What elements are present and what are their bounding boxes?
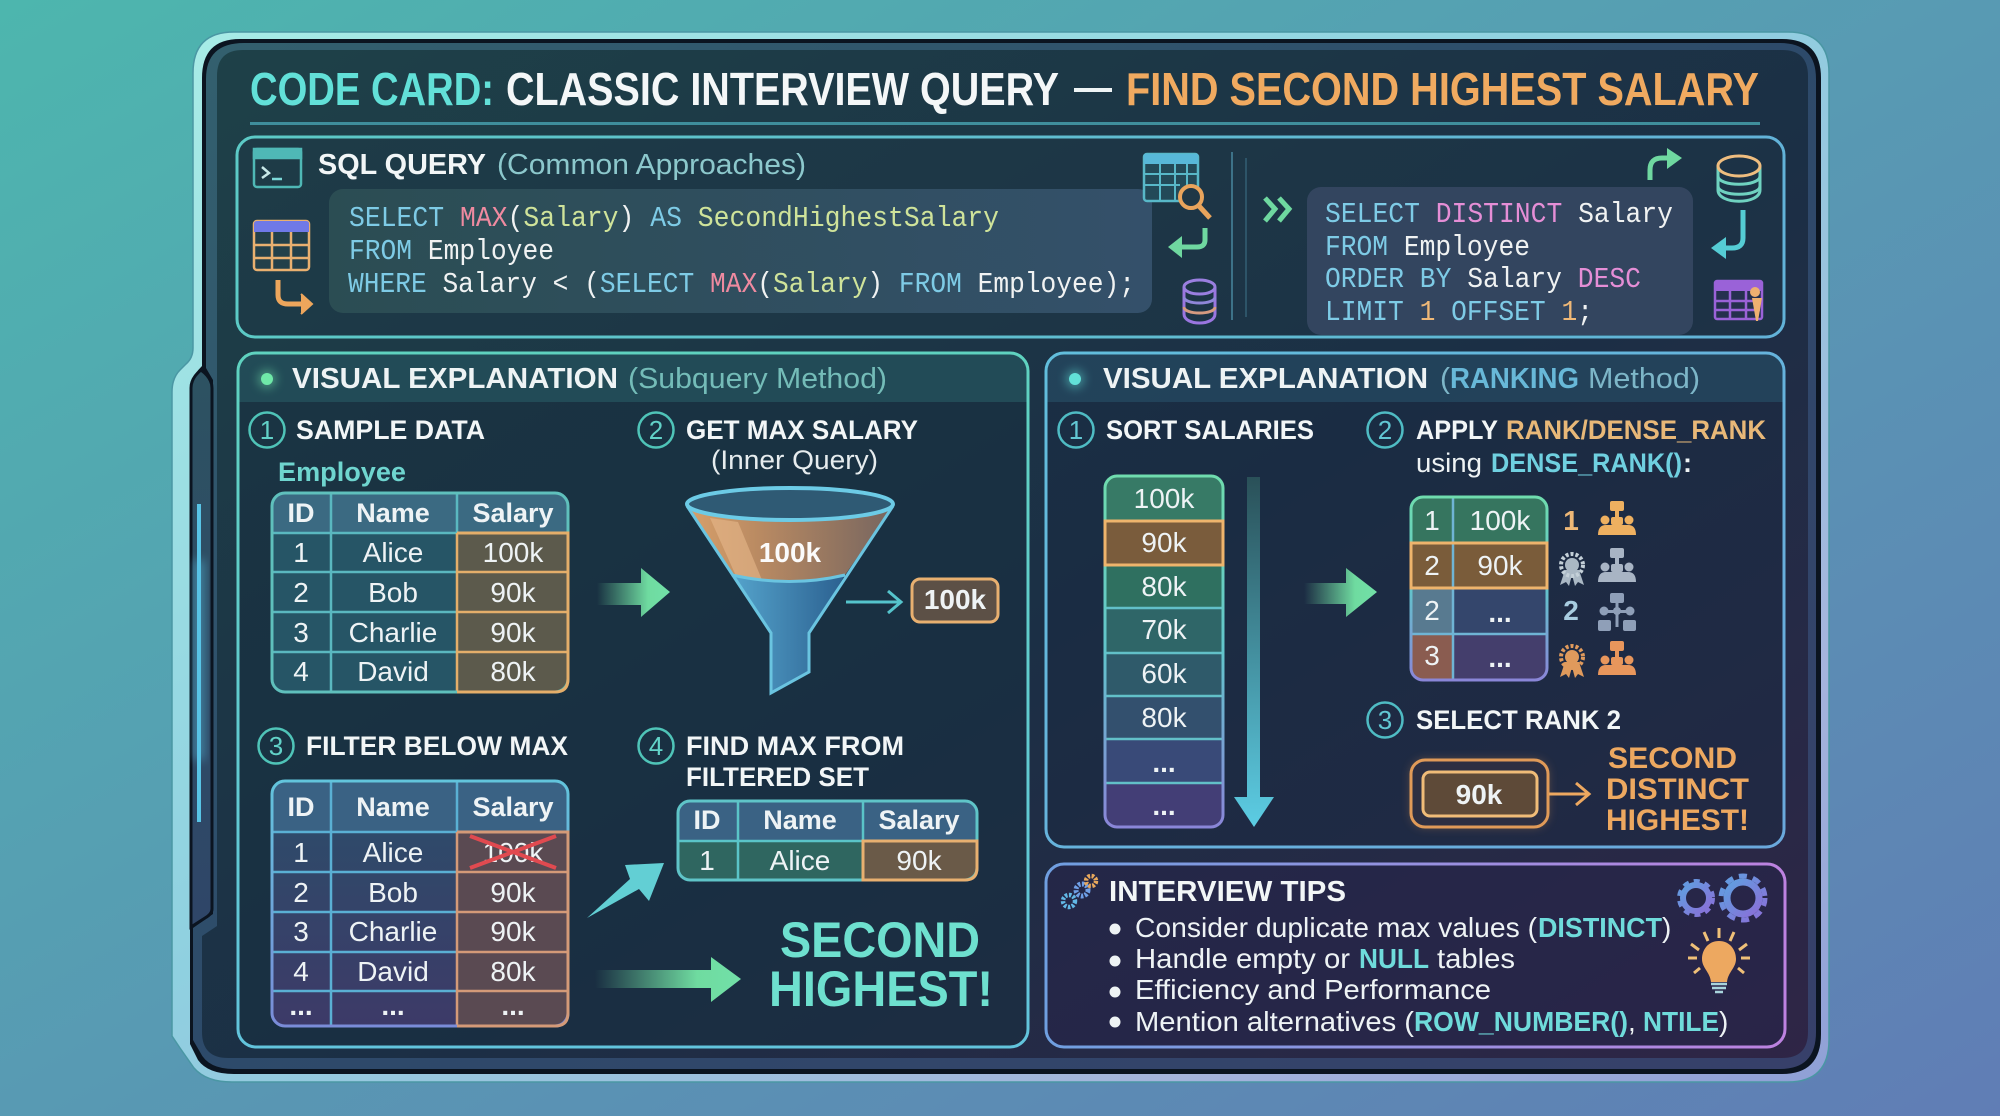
result box 100k: [912, 579, 998, 622]
panel header: RANKING: [1450, 363, 1579, 395]
panel header: Method): [1588, 363, 1700, 395]
icon: database: [1718, 156, 1760, 201]
sql heading: SQL QUERY: [318, 149, 486, 181]
callout: second distinct highest: HIGHEST!: [1606, 804, 1749, 837]
tips list: Consider duplicate max values (: [1135, 912, 1538, 943]
rank table: ...: [1488, 642, 1512, 673]
title: CLASSIC INTERVIEW QUERY: [506, 63, 1059, 115]
title: FIND SECOND HIGHEST SALARY: [1126, 63, 1759, 115]
table: filter below max: 90k: [490, 916, 537, 947]
table: filter below max: Alice: [363, 837, 423, 868]
rank labels and icons: 2: [1563, 595, 1579, 626]
table: filtered result: 90k: [896, 845, 943, 876]
icon: orange arrow: [278, 280, 312, 314]
table: filter below max: 4: [293, 956, 309, 987]
arrow: selected to label: [1549, 783, 1589, 805]
tips list: NULL: [1359, 943, 1429, 974]
table: sample data: 3: [293, 617, 309, 648]
divider: [1231, 152, 1247, 320]
rank table: 1: [1424, 505, 1440, 536]
code block 1: WHERE Salary < (SELECT MAX(Salary) FROM Employee);: [348, 268, 1135, 301]
step 1: 1: [1069, 415, 1083, 445]
step 2: [1368, 412, 1766, 478]
tips list: ROW_NUMBER(): [1414, 1006, 1628, 1037]
table: filter below max: ...: [289, 990, 313, 1021]
sorted salary stack: [1105, 476, 1223, 827]
step 2: RANK/DENSE_RANK: [1506, 415, 1766, 445]
callout: second highest: SECOND: [780, 912, 980, 968]
sorted salary stack: 80k: [1141, 702, 1188, 733]
code block 2: SELECT DISTINCT Salary: [1325, 198, 1673, 231]
table: sample data: 4: [293, 656, 309, 687]
step 3: FILTER BELOW MAX: [306, 731, 568, 761]
result box 100k: 100k: [924, 584, 987, 615]
strike: removed max: [470, 836, 556, 868]
table: filter below max: ...: [381, 990, 405, 1021]
step 2: [638, 412, 918, 475]
panel header: VISUAL EXPLANATION: [1103, 363, 1428, 395]
table: filter below max: ...: [501, 990, 525, 1021]
icon: terminal: [254, 149, 301, 187]
sorted salary stack: ...: [1152, 790, 1176, 821]
panel header: [258, 363, 887, 395]
table: filter below max: 80k: [490, 956, 537, 987]
callout: second distinct highest: DISTINCT: [1606, 773, 1749, 806]
rank table: 2: [1424, 595, 1440, 626]
table: sample data: 80k: [490, 656, 537, 687]
rank table: 100k: [1470, 505, 1531, 536]
arrow: to result: [595, 957, 741, 1002]
panel header: [1066, 363, 1700, 395]
sql heading: [318, 149, 806, 181]
callout: second highest: [769, 912, 993, 1017]
table: filter below max: Bob: [368, 877, 418, 908]
rank table: 90k: [1477, 550, 1524, 581]
step 2: (Inner Query): [711, 445, 878, 475]
panel header: (: [1440, 363, 1450, 395]
step 2: APPLY: [1416, 415, 1498, 445]
callout: second distinct highest: [1606, 742, 1749, 837]
step 1: SAMPLE DATA: [296, 415, 485, 445]
panel: sql query: [237, 137, 1784, 337]
step 2: 2: [649, 415, 663, 445]
panel header: (Subquery Method): [628, 363, 887, 395]
sorted salary stack: 70k: [1141, 614, 1188, 645]
tips list: ): [1662, 912, 1671, 943]
title: [250, 63, 1759, 115]
step 4: [638, 728, 904, 792]
icon: purple table with key: [1715, 281, 1762, 321]
table: filter below max: 3: [293, 916, 309, 947]
icon: teal return arrow: [1711, 210, 1743, 259]
step 3: 3: [269, 731, 283, 761]
rank table: 2: [1424, 550, 1440, 581]
table: filtered result: Alice: [770, 845, 830, 876]
tips list: [1110, 912, 1728, 1037]
tips list: ,: [1628, 1006, 1636, 1037]
step 1: 1: [260, 415, 274, 445]
icon: table magnifier: [1144, 154, 1210, 218]
step 2: using: [1416, 448, 1482, 478]
tips list: ): [1719, 1006, 1728, 1037]
tips list: tables: [1437, 943, 1515, 974]
arrow: funnel to result: [846, 591, 901, 613]
step 3: SELECT RANK 2: [1416, 705, 1621, 735]
code block 1: [329, 189, 1152, 313]
code block 2: LIMIT 1 OFFSET 1;: [1325, 296, 1593, 329]
tips heading: INTERVIEW TIPS: [1109, 876, 1346, 908]
rank table: ...: [1488, 597, 1512, 628]
sorted salary stack: 80k: [1141, 571, 1188, 602]
table: sample data: 90k: [490, 577, 537, 608]
step 2: 2: [1378, 415, 1392, 445]
icon: funnel: 100k: [759, 537, 822, 568]
table: filter below max: 1: [293, 837, 309, 868]
table: filter below max: 2: [293, 877, 309, 908]
callout: second highest: HIGHEST!: [769, 961, 993, 1017]
table: sample data: ID: [288, 498, 314, 528]
panel: subquery method: [238, 353, 1028, 1047]
title: CODE CARD:: [250, 63, 494, 115]
icon: light bulb: [1688, 928, 1750, 992]
tips list: Handle empty or: [1135, 943, 1350, 974]
step 4: 4: [649, 731, 663, 761]
tips list: Efficiency and Performance: [1135, 974, 1491, 1005]
table: sample data: Alice: [363, 537, 423, 568]
table: filtered result: [678, 801, 977, 880]
panel header: VISUAL EXPLANATION: [292, 363, 618, 395]
table: filter below max: ID: [288, 792, 314, 822]
sorted salary stack: ...: [1152, 747, 1176, 778]
icon: chevrons: [1265, 198, 1289, 221]
table: filter below max: [272, 781, 568, 1026]
table: sample data: Name: [356, 498, 430, 528]
step 2: :: [1683, 448, 1692, 478]
table: filter below max: Charlie: [349, 916, 437, 947]
table: sample data: David: [357, 656, 429, 687]
step 2: GET MAX SALARY: [686, 415, 918, 445]
sorted salary stack: 100k: [1134, 483, 1195, 514]
step 1: [1058, 412, 1314, 448]
rank labels and icons: 1: [1563, 505, 1579, 536]
table: filter below max: David: [357, 956, 429, 987]
table: filter below max: Name: [356, 792, 430, 822]
device frame: [172, 32, 1829, 1082]
step 1: [250, 412, 485, 448]
code block 1: SELECT MAX(Salary) AS SecondHighestSalary: [349, 202, 999, 235]
table: sample data: 2: [293, 577, 309, 608]
callout: second distinct highest: SECOND: [1608, 742, 1737, 775]
icon: gears: [1679, 876, 1765, 920]
sql heading: (Common Approaches): [497, 149, 806, 181]
step 3: [1368, 702, 1621, 738]
code block 2: FROM Employee: [1325, 231, 1530, 264]
tips list: NTILE: [1643, 1006, 1719, 1037]
selected value box: [1411, 760, 1548, 827]
selected value box: 90k: [1456, 779, 1503, 810]
arrow: diagonal: [587, 863, 664, 918]
table: filter below max: 100k: [483, 837, 544, 868]
panel: ranking method: [1046, 353, 1784, 847]
step 4: FILTERED SET: [686, 762, 869, 792]
tips list: DISTINCT: [1538, 912, 1662, 943]
table caption: Employee: [278, 457, 406, 487]
arrow: sort direction: [1234, 477, 1274, 827]
rank table: [1411, 497, 1547, 680]
table: filtered result: Salary: [878, 805, 960, 835]
table: filtered result: Name: [763, 805, 837, 835]
table: filtered result: ID: [694, 805, 720, 835]
table: sample data: Bob: [368, 577, 418, 608]
table: sample data: Salary: [472, 498, 554, 528]
table: filtered result: 1: [699, 845, 715, 876]
arrow: sort to rank: [1304, 568, 1377, 617]
code block 2: [1307, 187, 1693, 335]
rank table: 3: [1424, 640, 1440, 671]
panel: interview tips: [1046, 864, 1785, 1047]
table: sample data: 100k: [483, 537, 544, 568]
table: sample data: 90k: [490, 617, 537, 648]
code block 1: FROM Employee: [349, 235, 554, 268]
icon: table orange: [254, 221, 309, 270]
table: sample data: [272, 493, 568, 692]
icon: purple database: [1184, 280, 1215, 323]
sorted salary stack: 90k: [1141, 527, 1188, 558]
table: filter below max: Salary: [472, 792, 554, 822]
step 3: 3: [1378, 705, 1392, 735]
table: filter below max: 90k: [490, 877, 537, 908]
icon: funnel: [687, 488, 893, 693]
icon: small gears: [1063, 876, 1096, 907]
arrow: table to funnel: [597, 568, 670, 617]
icon: green up arrow: [1650, 148, 1682, 180]
rank labels and icons: [1560, 501, 1636, 678]
step 4: FIND MAX FROM: [686, 731, 904, 761]
icon: green return arrow: [1168, 228, 1205, 258]
code block 2: ORDER BY Salary DESC: [1325, 263, 1641, 296]
left side slot: [191, 370, 212, 927]
table: sample data: 1: [293, 537, 309, 568]
sorted salary stack: 60k: [1141, 658, 1188, 689]
step 2: DENSE_RANK(): [1491, 448, 1682, 478]
table: sample data: Charlie: [349, 617, 437, 648]
tips list: Mention alternatives (: [1135, 1006, 1415, 1037]
step 1: SORT SALARIES: [1106, 415, 1314, 445]
